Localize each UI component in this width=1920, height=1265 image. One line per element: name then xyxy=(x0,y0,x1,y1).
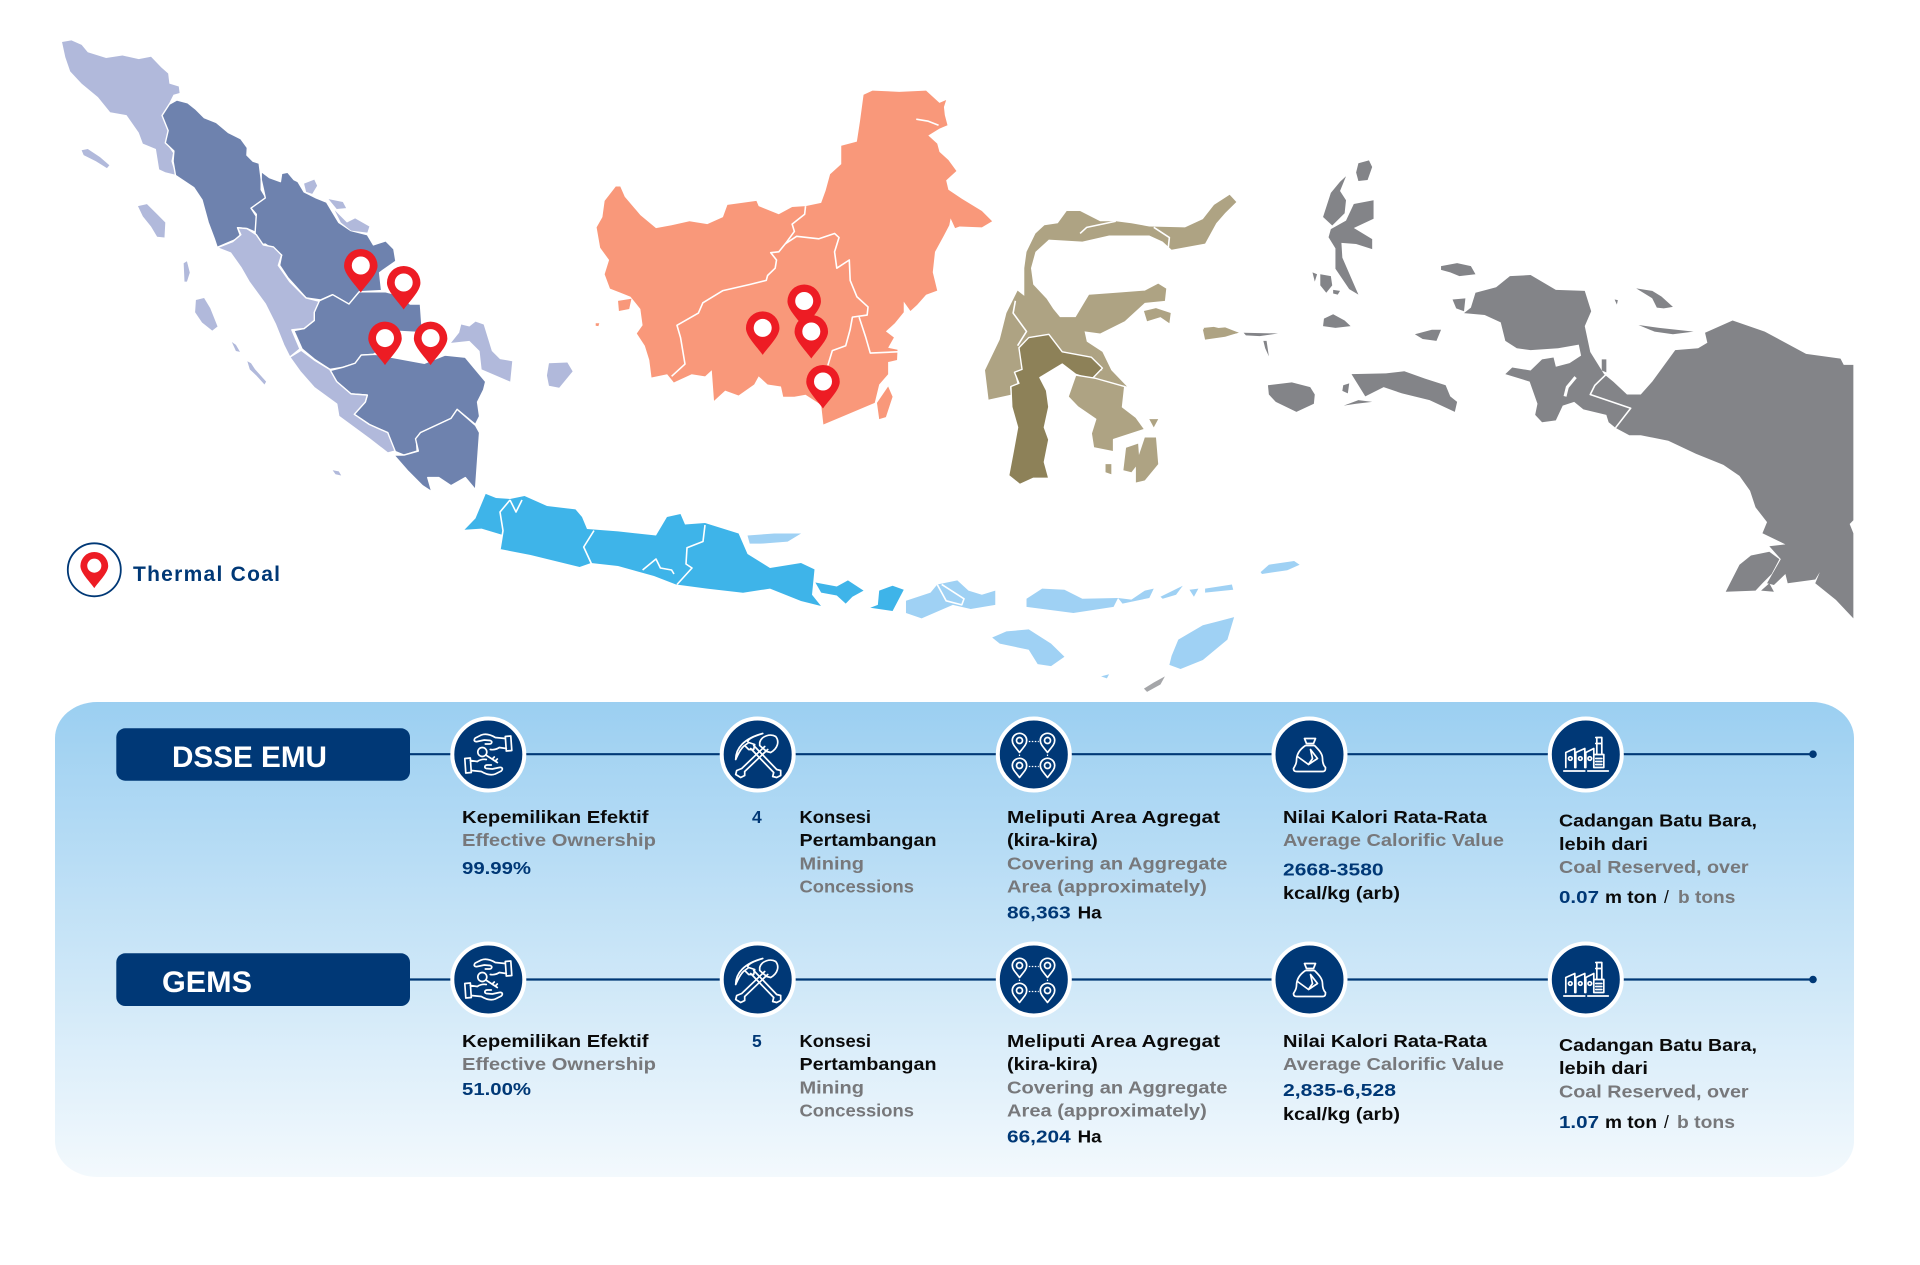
map pin: Sumatra 2 xyxy=(387,266,420,310)
text: aggregate area: (kira-kira) xyxy=(1007,830,1098,850)
text: coal reserves: Cadangan Batu Bara, xyxy=(1559,810,1757,830)
icon: factory xyxy=(1550,718,1622,790)
text: mining concessions xyxy=(752,1031,936,1120)
text: calorific value xyxy=(1283,807,1504,903)
text: coal reserves: m ton xyxy=(1605,1112,1657,1132)
text: mining concessions: 5 xyxy=(752,1031,762,1051)
region: Java xyxy=(464,494,821,606)
text: coal reserves xyxy=(1559,1035,1757,1132)
text: effective ownership xyxy=(462,1031,656,1099)
text: coal reserves: Coal Reserved, over xyxy=(1559,1082,1749,1102)
text: aggregate area: Meliputi Area Agregat xyxy=(1007,807,1220,827)
text: aggregate area: Ha xyxy=(1078,1126,1102,1146)
text: effective ownership xyxy=(462,807,656,878)
text: calorific value: kcal/kg (arb) xyxy=(1283,883,1400,903)
map pin: Sumatra 1 xyxy=(344,249,378,292)
region: Lesser Sunda Islands xyxy=(748,533,1234,692)
text: calorific value: 2,835-6,528 xyxy=(1283,1080,1396,1100)
text: coal reserves: lebih dari xyxy=(1559,1058,1648,1078)
panel: company data xyxy=(55,702,1854,1177)
icon: hands with key xyxy=(452,718,524,790)
region: Sulawesi xyxy=(985,195,1239,484)
text: mining concessions: Concessions xyxy=(800,876,914,896)
end dot xyxy=(1809,750,1817,758)
region: Maluku and Papua xyxy=(1204,160,1853,618)
text: effective ownership: Kepemilikan Efektif xyxy=(462,1031,649,1051)
legend: Thermal Coal xyxy=(68,543,280,596)
text: coal reserves: 1.07 xyxy=(1559,1112,1599,1132)
text: calorific value: 2668-3580 xyxy=(1283,860,1384,880)
connector line xyxy=(410,753,1813,755)
text: coal reserves: Cadangan Batu Bara, xyxy=(1559,1035,1757,1055)
map pin: Kalimantan 1 xyxy=(787,284,821,328)
text: effective ownership: Kepemilikan Efektif xyxy=(462,807,649,827)
text: aggregate area xyxy=(1007,1031,1228,1146)
text: mining concessions: Konsesi xyxy=(800,807,871,827)
text: coal reserves: b tons xyxy=(1678,887,1736,907)
text: mining concessions: Concessions xyxy=(800,1100,914,1120)
text: calorific value: Nilai Kalori Rata-Rata xyxy=(1283,807,1487,827)
text: effective ownership: Effective Ownership xyxy=(462,1054,656,1074)
icon: pick and shovel xyxy=(722,944,794,1016)
text: effective ownership: 99.99% xyxy=(462,858,532,878)
text: calorific value: Average Calorific Value xyxy=(1283,1054,1504,1074)
text: aggregate area: Covering an Aggregate xyxy=(1007,1078,1228,1098)
icon: pick and shovel xyxy=(722,718,794,790)
text: mining concessions: Pertambangan xyxy=(800,830,936,850)
text: aggregate area: Area (approximately) xyxy=(1007,876,1207,896)
text: effective ownership: Effective Ownership xyxy=(462,830,656,850)
text: aggregate area: Meliputi Area Agregat xyxy=(1007,1031,1220,1051)
text: aggregate area: Covering an Aggregate xyxy=(1007,854,1228,874)
icon: four connected pins xyxy=(998,718,1070,790)
icon: coal sack xyxy=(1274,944,1346,1016)
region: Sumatra xyxy=(62,40,573,492)
text: aggregate area: 66,204 xyxy=(1007,1126,1071,1146)
text: coal reserves: / xyxy=(1664,887,1669,907)
label: GEMS: GEMS xyxy=(162,966,252,999)
text: mining concessions: 4 xyxy=(752,807,762,827)
icon: factory xyxy=(1550,944,1622,1016)
text: calorific value: kcal/kg (arb) xyxy=(1283,1104,1400,1124)
text: mining concessions: Mining xyxy=(800,854,864,874)
label: GEMS xyxy=(116,953,410,1006)
connector line xyxy=(410,978,1813,981)
legend: Thermal Coal: Thermal Coal xyxy=(133,563,280,586)
row: DSSE EMU xyxy=(116,718,1817,922)
map pin: Kalimantan 2 xyxy=(746,311,779,355)
text: effective ownership: 51.00% xyxy=(462,1079,532,1099)
text: mining concessions xyxy=(752,807,936,896)
label: DSSE EMU: DSSE EMU xyxy=(172,741,327,774)
map of Indonesia xyxy=(62,40,1853,692)
text: mining concessions: Konsesi xyxy=(800,1031,871,1051)
text: calorific value: Nilai Kalori Rata-Rata xyxy=(1283,1031,1487,1051)
icon: four connected pins xyxy=(998,944,1070,1016)
icon: hands with key xyxy=(452,944,524,1016)
text: coal reserves: lebih dari xyxy=(1559,834,1648,854)
map pin: Sumatra 4 xyxy=(414,322,447,365)
text: aggregate area xyxy=(1007,807,1228,922)
row: GEMS xyxy=(116,944,1817,1146)
end dot xyxy=(1809,976,1817,983)
text: calorific value xyxy=(1283,1031,1504,1124)
map pin: Sumatra 3 xyxy=(368,322,402,365)
text: coal reserves xyxy=(1559,810,1757,907)
text: coal reserves: m ton xyxy=(1605,887,1657,907)
text: aggregate area: Area (approximately) xyxy=(1007,1100,1207,1120)
region: Kalimantan xyxy=(596,91,992,424)
text: coal reserves: Coal Reserved, over xyxy=(1559,857,1749,877)
text: coal reserves: b tons xyxy=(1677,1112,1735,1132)
map pin: Kalimantan 3 xyxy=(795,315,828,358)
icon: coal sack xyxy=(1274,718,1346,790)
text: aggregate area: Ha xyxy=(1078,902,1102,922)
text: mining concessions: Pertambangan xyxy=(800,1054,936,1074)
text: aggregate area: (kira-kira) xyxy=(1007,1054,1098,1074)
label: DSSE EMU xyxy=(116,728,410,781)
text: aggregate area: 86,363 xyxy=(1007,902,1071,922)
text: coal reserves: 0.07 xyxy=(1559,887,1599,907)
map pin: Kalimantan 4 xyxy=(806,365,840,408)
text: coal reserves: / xyxy=(1664,1112,1669,1132)
text: mining concessions: Mining xyxy=(800,1078,864,1098)
text: calorific value: Average Calorific Value xyxy=(1283,830,1504,850)
